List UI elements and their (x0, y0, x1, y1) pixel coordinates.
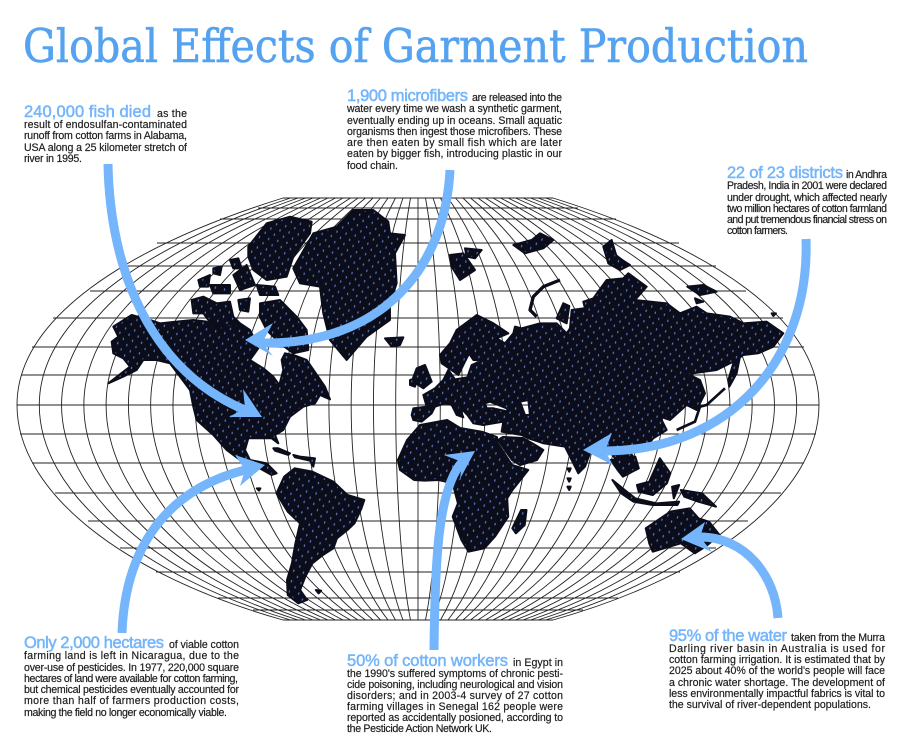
text block: 95% of the water (669, 627, 886, 711)
arrow: Egypt and Senegal (434, 451, 475, 650)
arrow: microfibers (245, 170, 450, 356)
South America, Africa, Asia-Pacific and Australia (257, 420, 719, 603)
text block: 50% of cotton workers: farming villages in Senegal 162 people were (347, 701, 563, 713)
text block: 240,000 fish died (24, 103, 187, 165)
text block: 95% of the water: less environmentally impactful fabrics is vital to (669, 688, 885, 700)
text block: Only 2,000 hectares: of viable cotton (169, 639, 239, 651)
text block: 1,900 microfibers (346, 87, 563, 172)
map grid (17, 198, 819, 620)
text block: Only 2,000 hectares: Only 2,000 hectares (24, 634, 164, 652)
arrow: Australia (681, 522, 778, 618)
text block: Only 2,000 hectares: hectares of land were available for cotton farming, (24, 673, 238, 685)
text block: 1,900 microfibers: eventually ending up in oceans. Small aquatic (347, 115, 563, 127)
title: Global Effects of Garment Production (23, 19, 808, 73)
text block: Only 2,000 hectares: over-use of pesticides. In 1977, 220,000 square (24, 662, 239, 674)
text block: 1,900 microfibers: eaten by bigger fish, introducing plastic in our (347, 148, 562, 160)
text block: 240,000 fish died: river in 1995. (24, 153, 82, 165)
text block: Only 2,000 hectares (24, 634, 239, 719)
text block: 22 of 23 districts: and put tremendous financial stress on (727, 214, 887, 226)
world map landmasses (108, 210, 783, 603)
text block: 22 of 23 districts (727, 164, 888, 237)
text block: 240,000 fish died: as the (157, 108, 187, 120)
text block: 240,000 fish died: USA along a 25 kilometer stretch of (24, 142, 187, 154)
text block: Only 2,000 hectares: but chemical pesticides eventually accounted for (24, 684, 239, 696)
text block: 22 of 23 districts: 22 of 23 districts (727, 164, 843, 182)
text block: 95% of the water: the survival of river-dependent populations. (669, 699, 871, 711)
text block: 95% of the water: Darling river basin in Australia is used for (669, 643, 885, 655)
text block: 240,000 fish died: 240,000 fish died (24, 103, 151, 121)
text block: 50% of cotton workers: cide poisoning, including neurological and vision (347, 679, 563, 691)
arrow: fish deaths to Alabama (108, 164, 262, 417)
arrow: Nicaragua (122, 455, 265, 633)
text block: 50% of cotton workers: the 1990's suffered symptoms of chronic pesti- (347, 668, 563, 680)
text block: 240,000 fish died: runoff from cotton farms in Alabama, (24, 130, 187, 142)
text block: 22 of 23 districts: in Andhra (846, 169, 887, 181)
text block: 1,900 microfibers: water every time we wash a synthetic garment, (346, 103, 562, 115)
text block: 50% of cotton workers: the Pesticide Action Network UK. (347, 723, 492, 735)
text block: 95% of the water: 95% of the water (669, 627, 788, 645)
text block: 95% of the water: taken from the Murra (791, 632, 885, 644)
text block: Only 2,000 hectares: more than half of farmers production costs, (24, 695, 239, 707)
text block: 50% of cotton workers: in Egypt in (513, 657, 563, 669)
text block: 1,900 microfibers: food chain. (347, 160, 398, 172)
text block: 1,900 microfibers: are then eaten by small fish which are later (347, 137, 562, 149)
text block: 50% of cotton workers: disorders; and in 2003-4 survey of 27 cotton (347, 690, 563, 702)
Eurasia, islands and UK (385, 233, 783, 473)
text block: 95% of the water: cotton farming irrigation. It is estimated that by (669, 654, 886, 666)
text block: Only 2,000 hectares: making the field no longer economically viable. (24, 707, 227, 719)
text block: Only 2,000 hectares: farming land is left in Nicaragua, due to the (24, 650, 239, 662)
North America and Arctic (108, 210, 405, 475)
text block: 95% of the water: 2025 about 40% of the world's people will face (669, 665, 885, 677)
text block: 50% of cotton workers: 50% of cotton workers (347, 652, 508, 670)
text block: 22 of 23 districts: two million hectares of cotton farmland (727, 203, 887, 215)
text block: 1,900 microfibers: are released into the (472, 92, 562, 104)
text block: 95% of the water: a chronic water shortage. The development of (669, 677, 885, 689)
text block: 22 of 23 districts: cotton farmers. (727, 225, 788, 237)
text block: 22 of 23 districts: Pradesh, India in 2001 were declared (727, 180, 887, 192)
arrow: Andhra Pradesh drought (583, 239, 806, 465)
text block: 22 of 23 districts: under drought, which affected nearly (727, 192, 888, 204)
text block: 1,900 microfibers: 1,900 microfibers (347, 87, 468, 105)
text block: 50% of cotton workers (347, 652, 563, 735)
text block: 240,000 fish died: result of endosulfan-contaminated (24, 119, 187, 131)
text block: 1,900 microfibers: organisms then ingest those microfibers. These (347, 126, 562, 138)
text block: 50% of cotton workers: reported as accidentally posioned, according to (347, 712, 563, 724)
